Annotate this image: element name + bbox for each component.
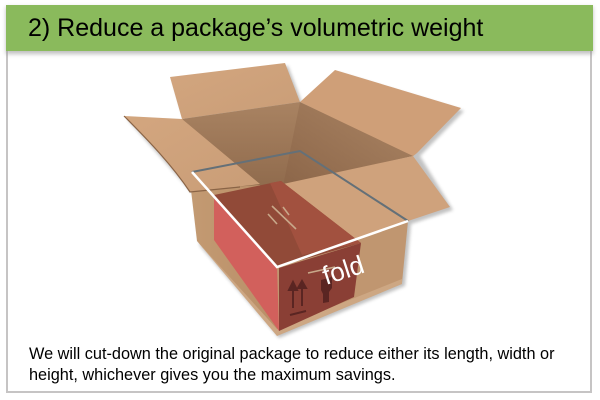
front bottom edge [197,241,402,336]
description text: height, whichever gives you the maximum savings. [29,366,396,384]
red cut-away: front [279,243,361,331]
red cut-away: top [214,181,361,267]
front flap [240,156,450,267]
header bar [6,5,593,54]
fold outline: far edges [192,151,408,221]
description text [29,345,555,384]
icon: this way up arrows [289,281,306,315]
fold outline: near edges [192,172,408,267]
box interior left [182,102,300,190]
illustration: open cardboard box [124,63,464,338]
fold label: fold [319,249,368,291]
left flap [124,116,260,192]
tape markings [268,206,335,273]
box shadow [127,66,464,338]
front wall [276,221,408,334]
left wall [191,185,277,333]
icon: fragile glass [321,277,332,303]
description text: We will cut-down the original package to reduce either its length, width or [29,345,555,363]
title: 2) Reduce a package’s volumetric weight [28,14,483,42]
box interior right [283,102,413,186]
back flap [170,63,300,119]
back right flap [300,70,461,157]
red cut-away: side [214,196,279,331]
